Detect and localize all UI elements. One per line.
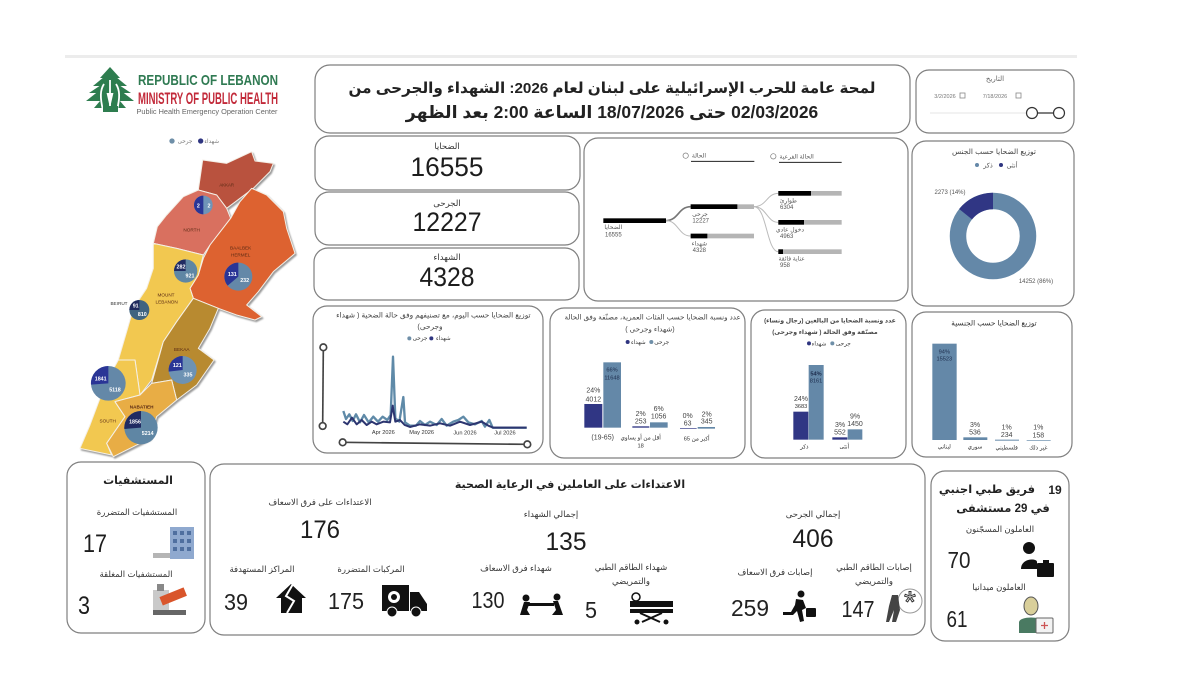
kpi: ambulance martyrs	[472, 563, 552, 613]
kpi: total martyrs: 135	[546, 528, 586, 556]
tree bar: wounded: 12227	[692, 219, 710, 225]
kpi: field workers: 61	[946, 606, 968, 632]
bar Syrian: 536	[969, 429, 981, 436]
panel: daily casualties line chart	[313, 306, 543, 453]
panel: gender donut: 2273 (14%)	[934, 190, 966, 196]
tree bar: martyrs	[691, 234, 754, 254]
donut chart	[958, 201, 1028, 271]
bars female: 1450	[847, 421, 863, 428]
icon: ambulance	[382, 585, 427, 617]
tree connectors	[666, 193, 778, 252]
pie: North	[194, 196, 213, 214]
pie: Nabatieh	[124, 411, 158, 444]
age bars over 65: 2%	[702, 412, 712, 419]
region labels: LEBANON	[156, 300, 178, 305]
kpi: field workers	[946, 582, 1026, 632]
panel: gender donut: 14252 (86%)	[1019, 279, 1053, 285]
kpi: ambulance wounded: إصابات فرق الاسعاف	[737, 567, 813, 578]
kpi: medical staff martyrs: 5	[585, 597, 597, 623]
kpi: ambulance wounded	[731, 567, 813, 621]
age bars over 65: 0%	[683, 413, 693, 420]
kpi: field workers: العاملون ميدانيا	[972, 582, 1026, 592]
icon: injured medic with star of life	[886, 586, 922, 622]
icon: running medic	[783, 590, 816, 622]
region labels: AKKAR	[219, 183, 234, 188]
x axis labels: May 2026	[409, 430, 434, 436]
panel: adults by sex bar chart: عدد ونسبة الضحايا من البالغين (رجال ونساء)	[764, 318, 896, 325]
age bars 19-65: (19-65)	[591, 435, 614, 442]
panel: foreign medical teams	[931, 471, 1069, 641]
pie: Nabatieh: 5214	[142, 431, 154, 437]
bar other: 1%	[1033, 425, 1043, 432]
pie: South: 1841	[95, 376, 107, 382]
kpi: attacks on ambulance teams: 176	[300, 516, 340, 544]
tree bar: regular admission: دخول عادي	[776, 227, 804, 234]
icon: cedar tree	[86, 67, 134, 112]
kpi: total wounded: إجمالي الجرحى	[786, 509, 840, 520]
region labels: SOUTH	[100, 418, 116, 423]
pie: Nabatieh: 1856	[129, 420, 141, 426]
bar Palestinian	[995, 425, 1019, 452]
kpi: damaged vehicles	[328, 564, 405, 614]
pie: Beirut	[129, 300, 149, 320]
bars male	[793, 365, 824, 451]
region labels: MOUNT	[157, 293, 175, 298]
tree bar: emergency: طوارئ	[780, 198, 797, 205]
map: Lebanon governorates with casualty pies	[80, 138, 295, 457]
bars female: 552	[834, 429, 846, 436]
map legend: شهداء	[204, 139, 219, 145]
age bars 19-65: 24%	[586, 388, 600, 395]
bar Palestinian: 234	[1001, 432, 1013, 439]
kpi: ambulance martyrs: 130	[472, 587, 504, 613]
pie: North: 2	[197, 203, 200, 209]
kpi: total wounded: 406	[792, 525, 834, 553]
pie: Mount Lebanon: 921	[186, 274, 194, 280]
map legend	[169, 138, 219, 145]
panel: nationality bar chart: توزيع الضحايا حسب الجنسية	[951, 318, 1037, 327]
age legend	[626, 340, 670, 346]
bar other	[1027, 425, 1051, 452]
kpi: detained workers	[948, 524, 1034, 573]
tree bar: martyrs: 4328	[693, 248, 707, 254]
region labels: BEIRUT	[110, 301, 128, 306]
icon: detained medic	[1021, 542, 1054, 577]
age bars under 18: 6%	[654, 406, 664, 413]
x axis labels	[372, 430, 516, 437]
donut legend: ذكر	[982, 162, 993, 170]
bars male: 8161	[810, 378, 822, 384]
line series: martyrs	[343, 406, 527, 428]
x axis labels: Apr 2026	[372, 430, 395, 436]
bar Lebanese: لبناني	[938, 445, 951, 451]
panel: gender donut	[912, 141, 1074, 306]
region labels: BEKAA	[174, 347, 190, 352]
age bars under 18: 253	[635, 419, 647, 426]
panel: attacks on healthcare workers	[210, 464, 925, 635]
kpi: ambulance martyrs: شهداء فرق الاسعاف	[480, 563, 552, 573]
pie: Mount Lebanon: 282	[177, 264, 185, 270]
kpi: medical staff wounded: والتمريضي	[855, 576, 893, 586]
panel: martyrs: الشهداء	[433, 252, 461, 262]
tree bar: martyrs: شهداء	[692, 240, 707, 247]
panel: date filter: 3/2/2026	[934, 94, 956, 100]
bars male: 3683	[795, 404, 807, 410]
region labels: NABATIEH	[130, 405, 154, 410]
age legend: جرحى	[654, 340, 670, 346]
line chart legend: شهداء	[436, 336, 451, 342]
pie: Bekaa: 121	[173, 363, 182, 369]
bars female: 9%	[850, 414, 860, 421]
age bars 19-65: 4012	[586, 396, 601, 403]
kpi: targeted centers	[224, 564, 295, 615]
tree bar: emergency	[778, 191, 842, 211]
pie: South: 5118	[109, 388, 121, 394]
kpi: medical staff martyrs	[585, 562, 667, 623]
vertical range slider	[319, 344, 327, 429]
bar Lebanese: 15523	[936, 356, 952, 362]
bar Syrian: 3%	[970, 422, 980, 429]
tree root bar: casualties	[603, 218, 666, 238]
panel: gender donut: توزيع الضحايا حسب الجنس	[952, 147, 1036, 156]
tree bar: regular admission: 4963	[780, 234, 794, 240]
kpi: ambulance wounded: 259	[731, 595, 769, 621]
bar other: 158	[1033, 433, 1044, 440]
logo: Republic of Lebanon Ministry of Public Health: REPUBLIC OF LEBANON	[138, 72, 278, 89]
pie: South	[91, 366, 126, 401]
age bars under 18: 2%	[636, 411, 646, 418]
kpi: damaged vehicles: 175	[328, 588, 364, 614]
kpi: targeted centers: المراكز المستهدفة	[229, 564, 295, 574]
line chart legend: جرحى	[413, 336, 428, 342]
region labels: BAALBEK	[230, 245, 252, 250]
bars male: 24%	[794, 396, 808, 403]
age bars 19-65: 66%	[606, 368, 618, 374]
panel: title: 02/03/2026 حتى 18/07/2026 الساعة 2:00 بعد الظهر	[405, 102, 819, 123]
tree bar: intensive care: عناية فائقة	[779, 255, 805, 262]
tree bar: regular admission	[776, 220, 842, 240]
icon: closed hospital	[153, 584, 187, 615]
panel: wounded: الجرحى	[433, 198, 461, 208]
tree root bar: casualties: 16555	[605, 232, 622, 238]
pie: Baalbek Hermel: 232	[240, 278, 249, 284]
panel: foreign medical teams: فريق طبي اجنبي	[939, 484, 1035, 496]
panel: total casualties: 16555	[410, 152, 484, 182]
age bars under 18: أقل من أو يساوي	[620, 433, 661, 441]
pie: Baalbek Hermel: 131	[228, 272, 237, 278]
kpi: medical staff wounded	[836, 562, 912, 622]
logo: Republic of Lebanon Ministry of Public Health	[86, 67, 278, 116]
panel: age group bar chart: عدد ونسبة الضحايا حسب الفئات العمرية، مصنّفة وفق الحالة	[564, 314, 741, 322]
panel: hospitals: 3	[78, 592, 90, 620]
kpi: total martyrs: إجمالي الشهداء	[524, 509, 578, 520]
panel: foreign medical teams: في 29 مستشفى	[956, 503, 1050, 515]
icon: hospital bed	[630, 593, 673, 624]
age bars 19-65	[584, 362, 621, 442]
age bars over 65: 63	[684, 420, 692, 427]
icon: injured medic with star of life: *	[904, 586, 916, 619]
panel: martyrs: 4328	[420, 262, 474, 292]
bars female: أنثى	[840, 443, 850, 451]
tree column headers: الحالة	[692, 153, 706, 160]
bar Palestinian: فلسطيني	[995, 446, 1018, 452]
logo: Republic of Lebanon Ministry of Public Health: Public Health Emergency Operation Center	[136, 109, 278, 116]
x axis labels: Jul 2026	[494, 431, 516, 437]
bars male: 54%	[810, 371, 822, 377]
panel: nationality bar chart	[912, 312, 1072, 457]
tree bar: emergency: 6304	[780, 205, 794, 211]
kpi: medical staff martyrs: شهداء الطاقم الطبي	[595, 562, 667, 573]
bars male: ذكر	[799, 444, 809, 451]
bar Lebanese: 94%	[939, 350, 950, 356]
panel: title	[315, 65, 910, 133]
date slider	[1026, 108, 1064, 118]
x axis labels: Jun 2026	[453, 431, 477, 437]
kpi: total martyrs	[524, 509, 586, 556]
kpi: attacks on ambulance teams	[268, 497, 372, 544]
region labels: NORTH	[183, 228, 200, 233]
panel: hospitals: المستشفيات	[103, 475, 173, 487]
panel: martyrs	[314, 248, 579, 300]
kpi: medical staff wounded: 147	[842, 596, 874, 622]
icon: field medic with kit	[1019, 597, 1053, 633]
icon: stretcher carriers	[520, 594, 563, 615]
tree column headers	[683, 153, 842, 162]
adults legend	[807, 341, 851, 347]
bars female: 3%	[835, 422, 845, 429]
panel: hospitals: المستشفيات المتضررة	[97, 507, 177, 517]
tree root bar: casualties: الضحايا	[604, 224, 623, 231]
kpi: medical staff martyrs: والتمريضي	[612, 576, 650, 586]
tree bar: wounded	[691, 204, 754, 225]
age bars under 18: 18	[638, 444, 644, 450]
pie: Bekaa: 335	[184, 372, 192, 378]
kpi: detained workers: العاملون المسجّنون	[966, 524, 1034, 534]
panel: attacks on healthcare workers: الاعتداءات على العاملين في الرعاية الصحية	[455, 479, 685, 491]
pie: Beirut: 91	[133, 303, 139, 309]
bar Palestinian: 1%	[1002, 425, 1012, 432]
region labels: HERMEL	[231, 252, 251, 257]
bars female	[832, 414, 863, 451]
icon: broken house	[276, 584, 306, 613]
kpi: damaged vehicles: المركبات المتضررة	[337, 564, 405, 574]
panel: adults by sex bar chart	[751, 310, 906, 458]
region labels	[100, 183, 252, 423]
kpi: medical staff wounded: إصابات الطاقم الطبي	[836, 562, 912, 573]
pie: Baalbek Hermel	[224, 263, 252, 291]
age bars under 18: 1056	[651, 413, 667, 420]
panel: hospitals: المستشفيات المغلقة	[99, 569, 173, 579]
panel: daily casualties line chart: توزيع الضحايا حسب اليوم، مع تصنيفهم وفق حالة الضحية ( شهداء	[336, 311, 531, 320]
logo: Republic of Lebanon Ministry of Public Health: MINISTRY OF PUBLIC HEALTH	[138, 89, 278, 108]
panel: date filter: التاريخ	[986, 76, 1004, 83]
panel: decomposition tree	[584, 138, 908, 301]
age bars over 65: أكبر من 65	[684, 434, 710, 442]
panel: hospitals: 17	[83, 530, 107, 558]
panel: daily casualties line chart: وجرحى)	[417, 322, 443, 331]
age bars over 65	[680, 412, 715, 442]
line chart legend	[407, 336, 451, 342]
panel: date filter	[916, 70, 1074, 133]
age bars 19-65: 11648	[604, 375, 620, 381]
kpi: targeted centers: 39	[224, 589, 248, 615]
pie: Beirut: 810	[138, 312, 147, 318]
panel: wounded	[315, 192, 579, 245]
tree bar: wounded: جرحى	[692, 212, 708, 218]
tree bar: intensive care	[778, 249, 842, 269]
kpi: detained workers: 70	[948, 547, 970, 573]
adults legend: جرحى	[836, 341, 851, 347]
kpi: total wounded	[786, 509, 840, 553]
panel: hospitals	[67, 462, 205, 633]
adults legend: شهداء	[812, 341, 827, 347]
age bars under 18	[620, 406, 668, 450]
donut legend	[975, 160, 1018, 170]
bar Lebanese	[932, 344, 957, 451]
bar Syrian	[963, 422, 987, 451]
age bars over 65: 345	[701, 419, 713, 426]
bar Syrian: سوري	[968, 445, 983, 451]
map legend: جرحى	[178, 139, 193, 145]
kpi: attacks on ambulance teams: الاعتداءات على فرق الاسعاف	[268, 497, 372, 507]
panel: title: لمحة عامة للحرب الإسرائيلية على لبنان لعام 2026: الشهداء والجرحى من	[348, 80, 876, 97]
icon: damaged hospital	[153, 527, 194, 559]
tree bar: intensive care: 958	[780, 263, 791, 269]
panel: age group bar chart	[550, 308, 745, 458]
pie: North: 2	[208, 203, 211, 209]
horizontal range slider	[339, 439, 531, 448]
panel: adults by sex bar chart: مصنّفة وفق الحالة ( شهداء وجرحى)	[772, 328, 878, 336]
panel: foreign medical teams: 19	[1048, 483, 1062, 497]
panel: total casualties	[315, 136, 580, 190]
bar other: غير ذلك	[1029, 446, 1048, 452]
line series: wounded	[343, 357, 527, 428]
panel: age group bar chart: (شهداء وجرحى )	[625, 326, 675, 334]
panel: date filter: 7/18/2026	[983, 94, 1007, 100]
age legend: شهداء	[631, 340, 646, 346]
donut legend: أنثى	[1006, 160, 1018, 170]
panel: wounded: 12227	[412, 207, 482, 237]
pie: Mount Lebanon	[174, 259, 197, 283]
tree column headers: الحالة الفرعية	[780, 153, 814, 160]
pie: Bekaa	[169, 356, 197, 384]
map regions	[80, 152, 295, 457]
panel: total casualties: الضحايا	[434, 141, 460, 151]
